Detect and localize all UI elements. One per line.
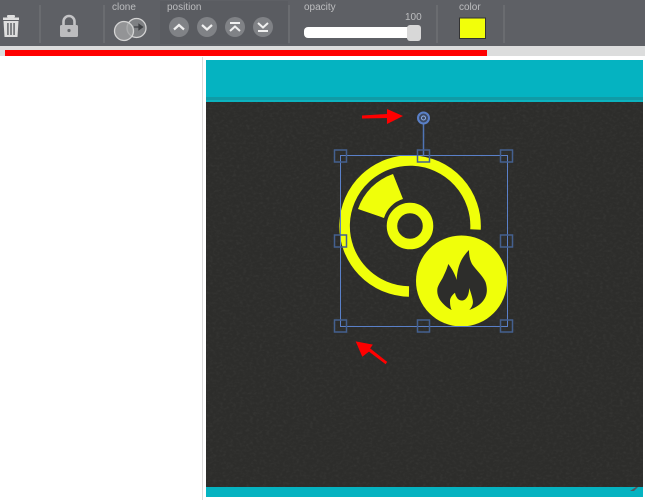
icon: trash can <box>3 15 19 37</box>
icon: send to back button <box>253 17 273 37</box>
icon: move forward button <box>169 17 189 37</box>
opacity value: 100 <box>405 12 422 23</box>
flame <box>437 250 487 310</box>
flame badge <box>416 236 507 326</box>
icon: clone circles <box>114 18 146 40</box>
icon: burning disc <box>345 161 507 326</box>
arrow: points to resize corner <box>356 342 386 364</box>
color swatch <box>460 18 486 38</box>
disc wedge <box>358 174 403 218</box>
disc hub ring <box>392 208 428 244</box>
red progress bar <box>5 50 487 56</box>
canvas panel <box>202 57 645 500</box>
rotate handle <box>418 112 429 124</box>
arrow: points to rotate handle <box>362 109 403 124</box>
icon: bring to front button <box>225 17 245 37</box>
toolbar <box>0 0 645 46</box>
dark textured background <box>206 102 643 487</box>
teal header band <box>206 60 643 97</box>
clone label: clone <box>112 2 136 13</box>
teal footer band <box>206 487 643 497</box>
selection box <box>334 112 512 332</box>
progress track <box>0 46 645 56</box>
icon: move backward button <box>197 17 217 37</box>
rotate connector <box>422 124 424 156</box>
resize handles <box>334 150 512 332</box>
footer corner mark <box>630 487 638 491</box>
disc outer arc <box>345 161 476 292</box>
color label: color <box>459 2 481 13</box>
icon: padlock <box>60 16 78 37</box>
opacity slider <box>304 25 421 41</box>
opacity label: opacity <box>304 2 336 13</box>
position label: position <box>167 2 201 13</box>
